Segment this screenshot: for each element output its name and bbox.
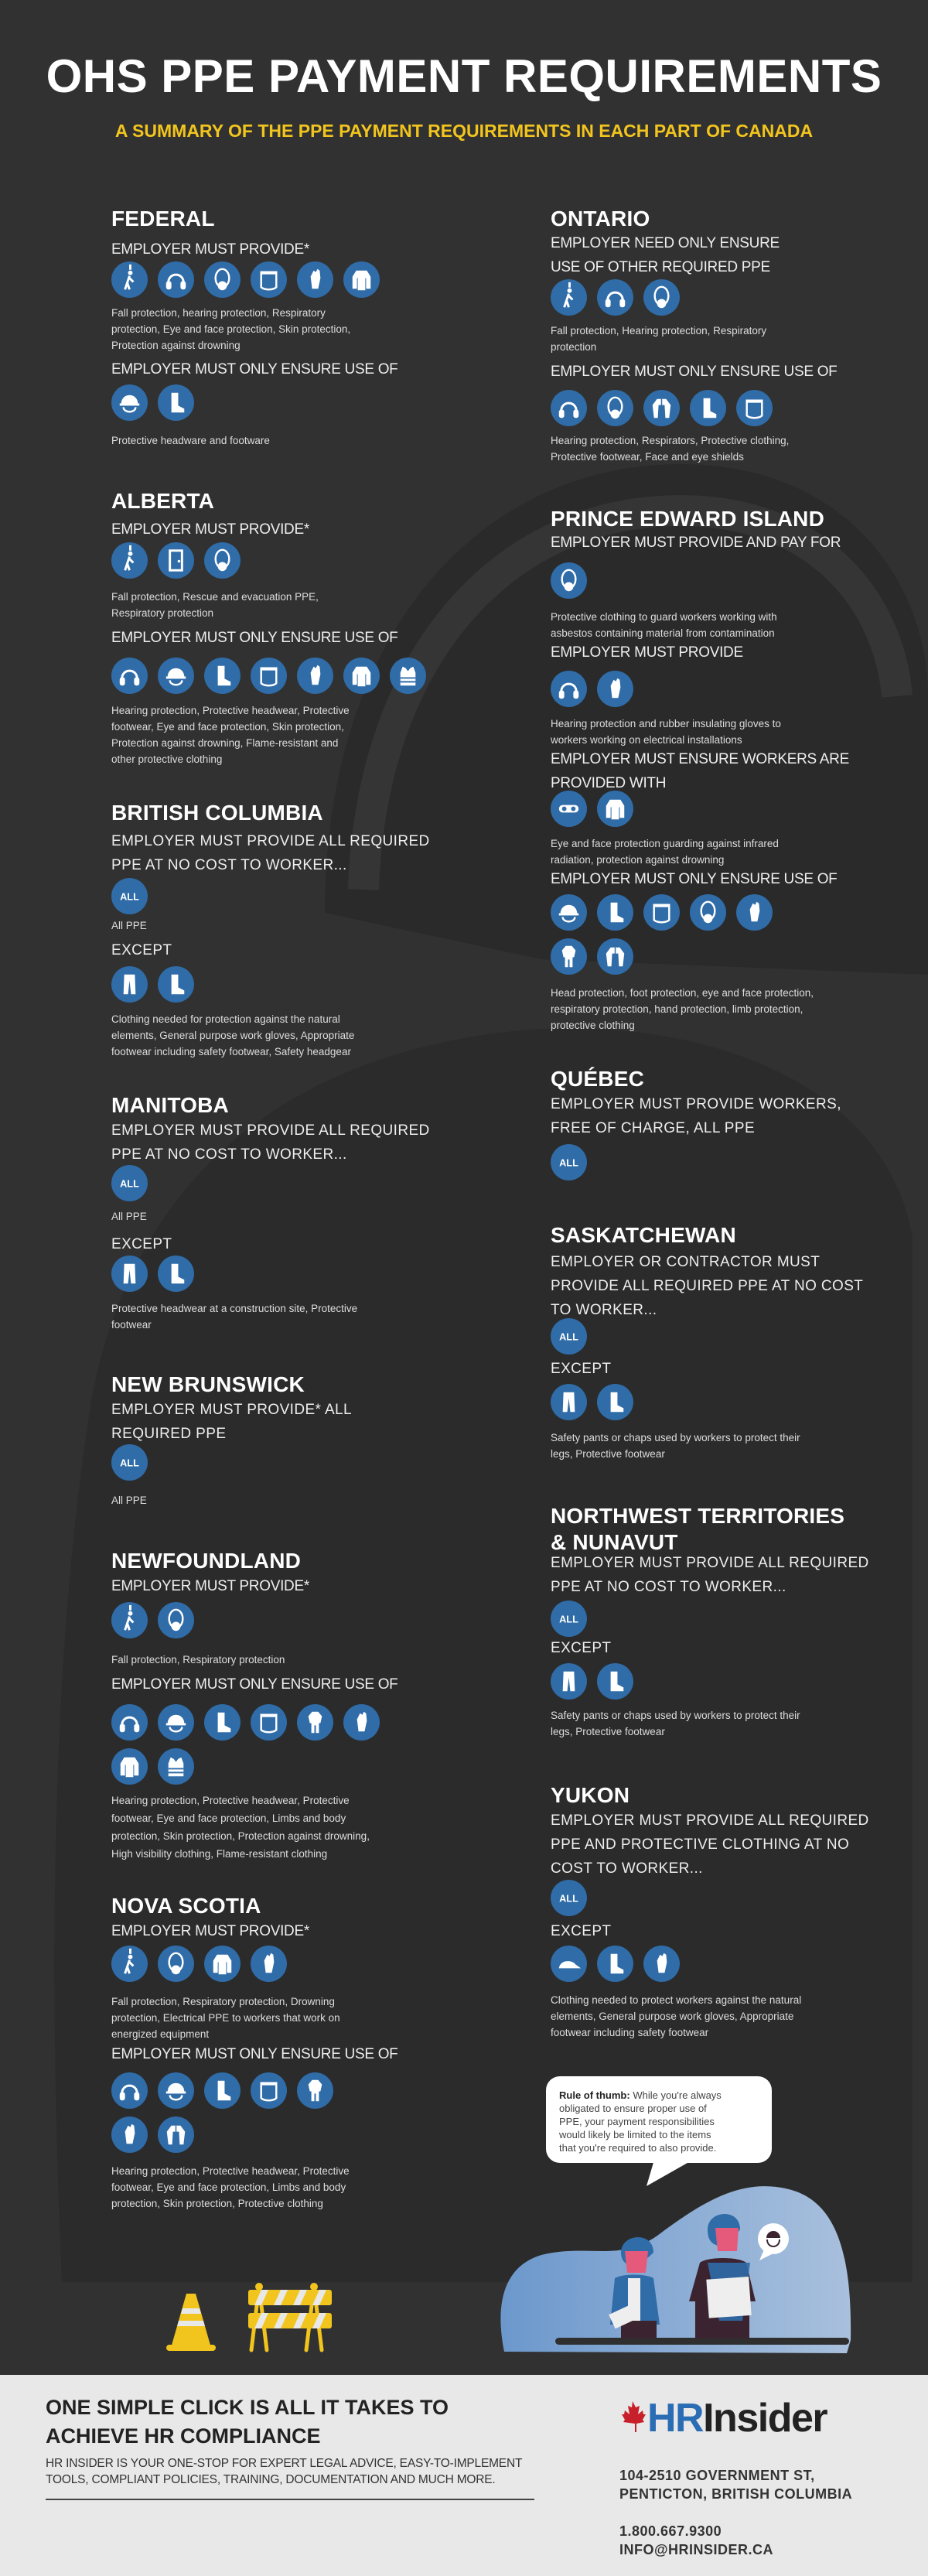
panel: newfoundland: footwear, Eye and face protection, Limbs and body (111, 1812, 346, 1824)
panel: northwest territories & nunavut: PPE AT NO COST TO WORKER... (551, 1579, 786, 1595)
panel: federal: EMPLOYER MUST ONLY ENSURE USE OF (111, 361, 397, 378)
icon row: newfoundland ensure 2 (111, 1748, 194, 1785)
panel: nova scotia: Fall protection, Respiratory protection, Drowning (111, 1996, 335, 2007)
subtitle: A SUMMARY OF THE PPE PAYMENT REQUIREMENTS IN EACH PART OF CANADA (115, 121, 813, 141)
panel: ontario: Protective footwear, Face and eye shields (551, 451, 744, 463)
panel: saskatchewan: legs, Protective footwear (551, 1448, 665, 1460)
panel: nova scotia: EMPLOYER MUST ONLY ENSURE USE OF (111, 2046, 397, 2062)
icon row: pei ensure 2 (551, 938, 633, 975)
panel: alberta: EMPLOYER MUST ONLY ENSURE USE OF (111, 630, 397, 646)
panel: nova scotia: EMPLOYER MUST PROVIDE* (111, 1923, 309, 1939)
panel: prince edward island: Head protection, foot protection, eye and face protection, (551, 987, 814, 999)
panel: newfoundland: Hearing protection, Protective headwear, Protective (111, 1795, 350, 1806)
panel: ontario: USE OF OTHER REQUIRED PPE (551, 259, 770, 275)
panel: yukon: Clothing needed to protect workers against the natural (551, 1994, 801, 2006)
icon: all: ALL (559, 1331, 578, 1342)
panel: manitoba: PPE AT NO COST TO WORKER... (111, 1146, 347, 1163)
panel: prince edward island: PROVIDED WITH (551, 775, 666, 791)
panel: northwest territories & nunavut: legs, Protective footwear (551, 1726, 665, 1737)
icon: all: ALL (120, 1177, 139, 1189)
panel: alberta (111, 489, 426, 765)
icon row: federal ensure (111, 384, 194, 421)
icon: barricade (246, 2282, 334, 2353)
panel: new brunswick: All PPE (111, 1495, 147, 1506)
panel: ontario (551, 207, 837, 463)
panel: british columbia: EXCEPT (111, 942, 172, 958)
panel: newfoundland: Fall protection, Respiratory protection (111, 1654, 285, 1666)
panel: alberta: Respiratory protection (111, 607, 213, 619)
text: High visibility clothing, Flame-resistant clothing (111, 1848, 327, 1860)
panel: prince edward island: Eye and face protection guarding against infrared (551, 838, 779, 849)
icon row: alberta provide (111, 542, 241, 579)
icon row: bc except (111, 966, 194, 1003)
callout: rule of thumb: Rule of thumb: While you're always (559, 2089, 722, 2101)
contact info: INFO@HRINSIDER.CA (619, 2542, 773, 2557)
footer description (46, 2455, 522, 2488)
panel: new brunswick: EMPLOYER MUST PROVIDE* ALL (111, 1402, 352, 1418)
panel: nova scotia: Hearing protection, Protective headwear, Protective (111, 2165, 350, 2177)
panel: british columbia: elements, General purpose work gloves, Appropriate (111, 1030, 354, 1041)
panel: saskatchewan: PROVIDE ALL REQUIRED PPE AT NO COST (551, 1278, 863, 1294)
panel: newfoundland: protection, Skin protection, Protection against drowning, (111, 1830, 370, 1842)
panel: yukon: YUKON (551, 1783, 629, 1807)
icon row: pei provide (551, 671, 633, 707)
panel: new brunswick (111, 1372, 352, 1506)
panel: federal: Protection against drowning (111, 340, 241, 351)
contact info: 104-2510 GOVERNMENT ST, (619, 2468, 815, 2483)
panel: saskatchewan: EMPLOYER OR CONTRACTOR MUST (551, 1254, 820, 1270)
icon row: alberta ensure (111, 658, 426, 694)
panel: manitoba: EXCEPT (111, 1236, 172, 1252)
panel: prince edward island: radiation, protection against drowning (551, 854, 724, 866)
logo: HR Insider: HRInsider (647, 2396, 827, 2441)
icon row: ontario provide (551, 279, 680, 316)
icon: all: ALL (120, 890, 139, 902)
icon: all: ALL (559, 1156, 578, 1168)
panel: british columbia: BRITISH COLUMBIA (111, 801, 323, 825)
panel: nova scotia: protection, Skin protection, Protective clothing (111, 2198, 323, 2209)
contact info: PENTICTON, BRITISH COLUMBIA (619, 2486, 852, 2502)
panel: alberta: ALBERTA (111, 489, 214, 513)
panel: yukon: elements, General purpose work gloves, Appropriate (551, 2011, 793, 2022)
panel: manitoba (111, 1093, 430, 1331)
panel: yukon: PPE AND PROTECTIVE CLOTHING AT NO (551, 1836, 849, 1853)
icon row: nova scotia provide (111, 1946, 287, 1982)
panel: saskatchewan: EXCEPT (551, 1361, 611, 1377)
panel: federal: FEDERAL (111, 207, 215, 231)
footer heading (46, 2393, 449, 2451)
panel: newfoundland: EMPLOYER MUST PROVIDE* (111, 1578, 309, 1594)
panel: ontario: EMPLOYER MUST ONLY ENSURE USE OF (551, 364, 837, 380)
callout: rule of thumb: that you're required to also provide. (559, 2142, 716, 2154)
icon row: pei ensure (551, 894, 773, 931)
panel: prince edward island: asbestos containing material from contamination (551, 627, 775, 639)
panel: nova scotia: protection, Electrical PPE to workers that work on (111, 2012, 340, 2024)
icon: all (551, 1880, 587, 1916)
panel: british columbia (111, 801, 430, 1057)
callout: rule of thumb (546, 2076, 772, 2188)
panel: saskatchewan (551, 1223, 863, 1460)
panel: prince edward island: respiratory protection, hand protection, limb protection, (551, 1003, 803, 1015)
panel: british columbia: EMPLOYER MUST PROVIDE ALL REQUIRED (111, 833, 430, 849)
text: footwear (111, 1319, 152, 1331)
text: footwear including safety footwear (551, 2027, 708, 2038)
panel: ontario: Fall protection, Hearing protection, Respiratory (551, 325, 766, 337)
panel: nova scotia: energized equipment (111, 2028, 209, 2040)
panel: northwest territories & nunavut: EXCEPT (551, 1640, 611, 1656)
panel: saskatchewan: Safety pants or chaps used by workers to protect their (551, 1432, 800, 1443)
icon: all (551, 1318, 587, 1355)
panel: northwest territories & nunavut: Safety pants or chaps used by workers to protect their (551, 1710, 800, 1721)
panel: manitoba: All PPE (111, 1211, 147, 1222)
icon: all (111, 1444, 148, 1481)
footer heading: ACHIEVE HR COMPLIANCE (46, 2424, 321, 2448)
panel: yukon: EXCEPT (551, 1923, 611, 1939)
panel: manitoba: Protective headwear at a construction site, Protective (111, 1303, 357, 1314)
panel: quebec: QUÉBEC (551, 1067, 644, 1091)
panel: ontario: ONTARIO (551, 207, 650, 231)
panel: nova scotia: NOVA SCOTIA (111, 1894, 261, 1918)
icon: all (551, 1144, 587, 1180)
panel: prince edward island: Hearing protection and rubber insulating gloves to (551, 718, 781, 729)
panel: prince edward island: protective clothing (551, 1020, 635, 1031)
panel: nova scotia: footwear, Eye and face protection, Limbs and body (111, 2181, 346, 2193)
panel: ontario: protection (551, 341, 596, 353)
panel: british columbia: Clothing needed for protection against the natural (111, 1013, 340, 1025)
contact info (619, 2466, 852, 2559)
icon row: sask except (551, 1384, 633, 1420)
panel: newfoundland: EMPLOYER MUST ONLY ENSURE USE OF (111, 1676, 397, 1693)
panel: british columbia: PPE AT NO COST TO WORKER... (111, 857, 347, 873)
panel: british columbia: footwear including safety footwear, Safety headgear (111, 1046, 351, 1057)
icon: all: ALL (559, 1892, 578, 1904)
panel: prince edward island (551, 507, 849, 1031)
panel: new brunswick: NEW BRUNSWICK (111, 1372, 305, 1396)
panel: british columbia: All PPE (111, 920, 147, 931)
panel: quebec: FREE OF CHARGE, ALL PPE (551, 1120, 755, 1136)
panel: federal: EMPLOYER MUST PROVIDE* (111, 241, 309, 258)
footer description: TOOLS, COMPLIANT POLICIES, TRAINING, DOCUMENTATION AND MUCH MORE. (46, 2473, 496, 2486)
panel: newfoundland: NEWFOUNDLAND (111, 1549, 301, 1573)
panel: prince edward island: Protective clothing to guard workers working with (551, 611, 777, 623)
icon row: newfoundland provide (111, 1602, 194, 1638)
icon row: pei pay (551, 562, 587, 599)
title: OHS PPE PAYMENT REQUIREMENTS (46, 50, 882, 102)
footer description: HR INSIDER IS YOUR ONE-STOP FOR EXPERT LEGAL ADVICE, EASY-TO-IMPLEMENT (46, 2457, 522, 2470)
panel: prince edward island: EMPLOYER MUST PROVIDE AND PAY FOR (551, 535, 841, 551)
panel: alberta: Hearing protection, Protective headwear, Protective (111, 705, 350, 716)
panel: yukon (551, 1783, 869, 2038)
callout: rule of thumb: would likely be limited to the items (559, 2129, 711, 2140)
panel: alberta: other protective clothing (111, 753, 222, 765)
icon row: yukon except (551, 1946, 680, 1982)
panel: northwest territories & nunavut: EMPLOYER MUST PROVIDE ALL REQUIRED (551, 1555, 869, 1571)
icon: all: ALL (559, 1613, 578, 1625)
icon: all (111, 1165, 148, 1201)
icon row: newfoundland ensure (111, 1704, 380, 1741)
panel: prince edward island: EMPLOYER MUST ENSURE WORKERS ARE (551, 751, 849, 767)
icon row: nova scotia ensure (111, 2072, 333, 2109)
icon row: nova scotia ensure 2 (111, 2116, 194, 2153)
panel: newfoundland (111, 1549, 397, 1860)
panel: quebec: EMPLOYER MUST PROVIDE WORKERS, (551, 1096, 841, 1112)
panel: prince edward island: EMPLOYER MUST ONLY ENSURE USE OF (551, 871, 837, 887)
footer (0, 2375, 928, 2576)
panel: northwest territories & nunavut: & NUNAVUT (551, 1530, 678, 1554)
panel: yukon: EMPLOYER MUST PROVIDE ALL REQUIRED (551, 1812, 869, 1829)
panel: northwest territories & nunavut (551, 1504, 869, 1737)
panel: federal: Fall protection, hearing protection, Respiratory (111, 307, 326, 319)
footer heading: ONE SIMPLE CLICK IS ALL IT TAKES TO (46, 2396, 449, 2419)
icon row: federal provide (111, 261, 380, 298)
icon: all (551, 1601, 587, 1637)
panel: quebec (551, 1067, 841, 1180)
panel: manitoba: MANITOBA (111, 1093, 229, 1117)
panel: ontario: EMPLOYER NEED ONLY ENSURE (551, 235, 780, 251)
panel: prince edward island: PRINCE EDWARD ISLAND (551, 507, 824, 531)
panel: northwest territories & nunavut: NORTHWEST TERRITORIES (551, 1504, 844, 1528)
callout: rule of thumb: PPE, your payment responsibilities (559, 2116, 715, 2127)
panel: new brunswick: REQUIRED PPE (111, 1426, 226, 1442)
icon row: manitoba except (111, 1256, 194, 1292)
icon: all: ALL (120, 1457, 139, 1468)
panel: saskatchewan: SASKATCHEWAN (551, 1223, 736, 1247)
panel: saskatchewan: TO WORKER... (551, 1302, 657, 1318)
icon row: ontario ensure (551, 390, 773, 426)
panel: manitoba: EMPLOYER MUST PROVIDE ALL REQUIRED (111, 1122, 430, 1139)
panel: alberta: Protection against drowning, Flame-resistant and (111, 737, 338, 749)
panel: ontario: Hearing protection, Respirators, Protective clothing, (551, 435, 789, 446)
icon: traffic cone (165, 2291, 217, 2352)
panel: alberta: EMPLOYER MUST PROVIDE* (111, 521, 309, 538)
illustration: workers (495, 2172, 858, 2358)
callout: rule of thumb: obligated to ensure proper use of (559, 2103, 707, 2114)
panel: federal: Protective headware and footware (111, 435, 270, 446)
contact info: 1.800.667.9300 (619, 2523, 722, 2539)
panel: prince edward island: EMPLOYER MUST PROVIDE (551, 644, 743, 661)
panel: nova scotia (111, 1894, 397, 2209)
icon: all (111, 878, 148, 914)
panel: alberta: footwear, Eye and face protection, Skin protection, (111, 721, 344, 733)
panel: yukon: COST TO WORKER... (551, 1860, 703, 1877)
icon row: pei provided with (551, 791, 633, 827)
panel: alberta: Fall protection, Rescue and evacuation PPE, (111, 591, 319, 603)
panel: federal: protection, Eye and face protection, Skin protection, (111, 323, 350, 335)
panel: prince edward island: workers working on electrical installations (551, 734, 742, 746)
icon row: nwt except (551, 1663, 633, 1700)
panel: federal (111, 207, 397, 446)
